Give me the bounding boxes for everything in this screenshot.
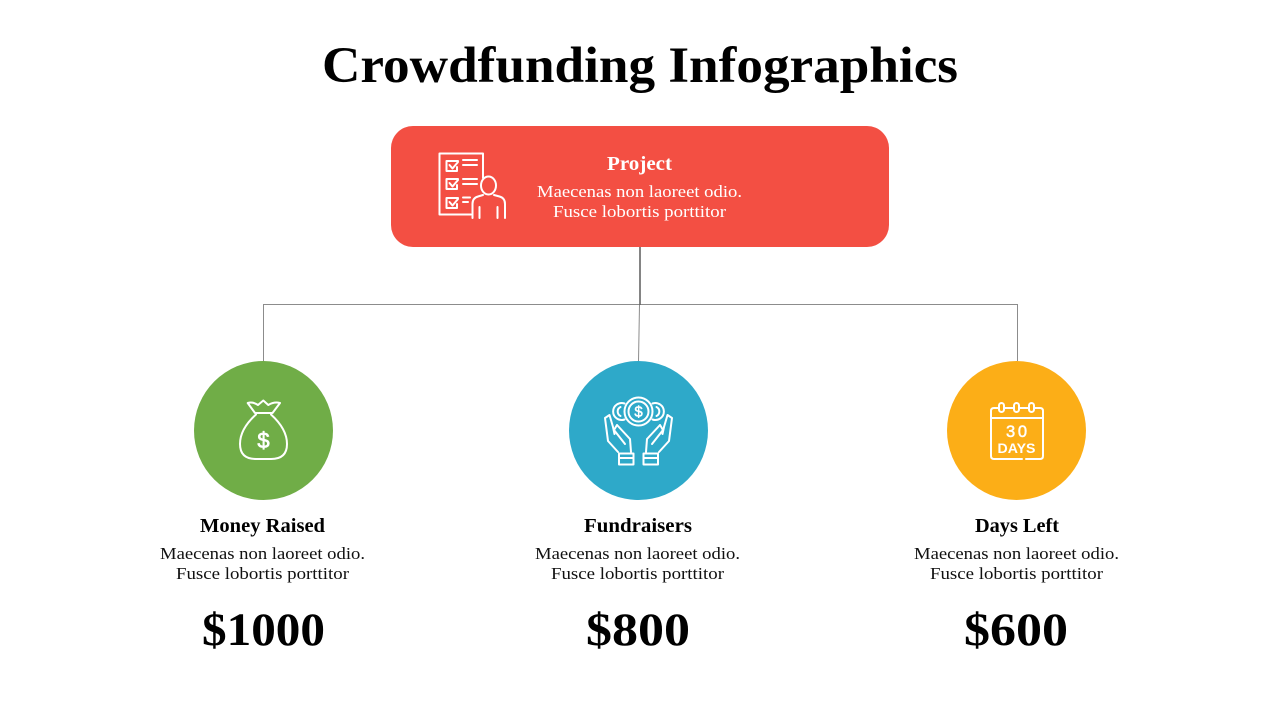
description: days left: Maecenas non laoreet odio. [914, 544, 1119, 563]
panel: fundraisers [535, 361, 740, 656]
description: money raised: Maecenas non laoreet odio. [160, 544, 365, 563]
circle: fundraisers [569, 361, 708, 500]
heading: money raised: Money Raised [200, 515, 325, 537]
description: days left: Fusce lobortis porttitor [930, 564, 1104, 583]
panel: money raised [160, 361, 365, 656]
project heading: Project [607, 153, 672, 175]
icon: hands holding coins [605, 398, 672, 464]
description: fundraisers: Fusce lobortis porttitor [551, 564, 725, 583]
icon: checklist and person [440, 154, 505, 218]
icon: calendar: DAYS [998, 440, 1036, 456]
description: fundraisers: Maecenas non laoreet odio. [535, 544, 740, 563]
value: days left: $600 [964, 604, 1068, 656]
icon: money bag: $ [257, 428, 270, 453]
panel: days left [914, 361, 1119, 656]
description: fundraisers [535, 544, 740, 583]
connector lines [264, 247, 1018, 361]
value: money raised: $1000 [202, 604, 325, 656]
project description [537, 182, 742, 221]
description: money raised [160, 544, 365, 583]
heading: fundraisers: Fundraisers [584, 515, 692, 537]
description: days left [914, 544, 1119, 583]
icon: calendar: 30 [1006, 423, 1027, 441]
icon: calendar [991, 403, 1043, 459]
circle: days left [947, 361, 1086, 500]
title: Crowdfunding Infographics [322, 38, 958, 94]
icon: money bag [240, 400, 287, 459]
description: money raised: Fusce lobortis porttitor [176, 564, 350, 583]
project description: Maecenas non laoreet odio. [537, 182, 742, 201]
panel: project [391, 126, 889, 247]
icon: hands holding coins: $ [634, 404, 643, 420]
project description: Fusce lobortis porttitor [553, 202, 727, 221]
value: fundraisers: $800 [586, 604, 690, 656]
circle: money raised [194, 361, 333, 500]
heading: days left: Days Left [975, 515, 1059, 537]
